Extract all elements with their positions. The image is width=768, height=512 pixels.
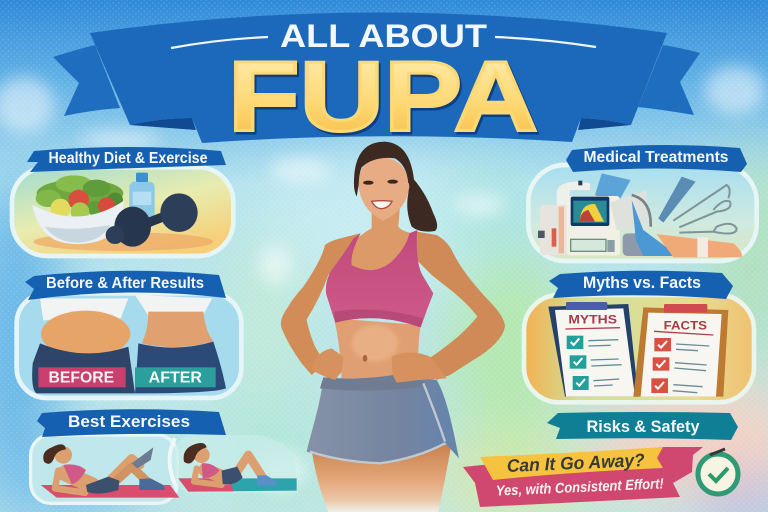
pink ribbon — [463, 447, 703, 507]
ponytail — [407, 173, 437, 232]
tube and pump — [610, 190, 647, 230]
right banner tail — [638, 45, 700, 115]
neck and chest — [350, 207, 418, 270]
callout answer: Yes, with Consistent Effort! — [496, 476, 664, 500]
ribbon: before and after results — [25, 271, 226, 300]
panel: healthy diet — [12, 167, 233, 256]
clipboard: facts — [633, 304, 728, 397]
label: after: AFTER — [149, 370, 202, 387]
ribbon: healthy diet and exercise: Healthy Diet & Exercise — [48, 150, 208, 167]
icon: salad bowl — [32, 175, 124, 244]
panel: before and after — [17, 293, 241, 398]
blue packet — [595, 173, 631, 205]
title line 2: FUPA — [228, 40, 538, 152]
panel: exercise one — [31, 435, 179, 503]
frame arc — [170, 438, 177, 488]
ribbon: myths vs facts: Myths vs. Facts — [583, 274, 701, 292]
abs highlight — [352, 325, 398, 362]
icon: water bottle — [129, 173, 155, 218]
shorts waistband — [320, 375, 427, 390]
navel — [363, 355, 367, 362]
checklist: facts — [651, 338, 709, 393]
ribbon: risks and safety: Risks & Safety — [586, 418, 700, 436]
sports bra — [326, 230, 433, 327]
ribbon: best exercises: Best Exercises — [68, 413, 190, 431]
panel: exercise two — [169, 435, 297, 493]
label: before — [38, 367, 126, 387]
main ribbon — [90, 12, 667, 143]
icon: dumbbell — [106, 193, 198, 247]
before torso — [32, 298, 135, 393]
eyes — [363, 181, 374, 185]
head — [354, 142, 414, 221]
right arm — [417, 232, 505, 380]
icon: syringe device — [658, 177, 696, 223]
icon: medical device — [538, 181, 620, 255]
icon: scissors and forceps — [673, 185, 737, 234]
left banner tail — [53, 45, 120, 116]
ribbon: myths vs facts — [549, 271, 733, 299]
title line 1: ALL ABOUT — [280, 18, 488, 54]
left arm — [281, 233, 360, 375]
smile — [372, 201, 392, 209]
checklist: myths — [567, 336, 622, 390]
clipboard: myths: MYTHS — [568, 312, 617, 326]
folds shading — [130, 118, 631, 130]
shorts — [307, 375, 459, 464]
clipboard: facts: FACTS — [664, 318, 707, 332]
title rule right — [495, 37, 596, 47]
table shadow — [33, 232, 213, 251]
label: before: BEFORE — [48, 370, 114, 387]
ribbon: risks and safety — [547, 412, 738, 440]
after torso — [135, 295, 226, 393]
ribbon: best exercises — [37, 409, 226, 437]
right column panels — [524, 165, 757, 402]
patient arm — [657, 234, 742, 257]
ribbon: before and after results: Before & After Results — [46, 275, 204, 292]
mat — [41, 485, 179, 498]
ribbon: medical treatments: Medical Treatments — [584, 149, 728, 166]
hands — [312, 348, 447, 383]
callout: can it go away — [463, 447, 703, 507]
left column panels — [12, 167, 297, 503]
shorts trim — [310, 383, 445, 463]
central figure: woman in pink top — [281, 142, 505, 512]
label: after — [135, 367, 216, 387]
bra band — [334, 309, 423, 327]
title line 2 shadow: FUPA — [230, 43, 540, 154]
clipboard: myths — [548, 302, 638, 397]
mat — [178, 478, 297, 492]
panel: medical treatments — [528, 165, 757, 261]
icon: clock with check — [698, 449, 738, 494]
legs — [312, 443, 452, 512]
title rule left — [171, 37, 268, 48]
figure: crunch — [43, 444, 165, 494]
title banner — [53, 12, 700, 154]
yellow ribbon — [480, 447, 663, 480]
callout question: Can It Go Away? — [506, 450, 645, 476]
ribbon: healthy diet and exercise — [27, 147, 226, 172]
figure: sit up — [184, 443, 277, 485]
ribbon: medical treatments — [566, 145, 747, 172]
panel: myths vs facts — [524, 295, 754, 402]
torso — [334, 318, 421, 378]
